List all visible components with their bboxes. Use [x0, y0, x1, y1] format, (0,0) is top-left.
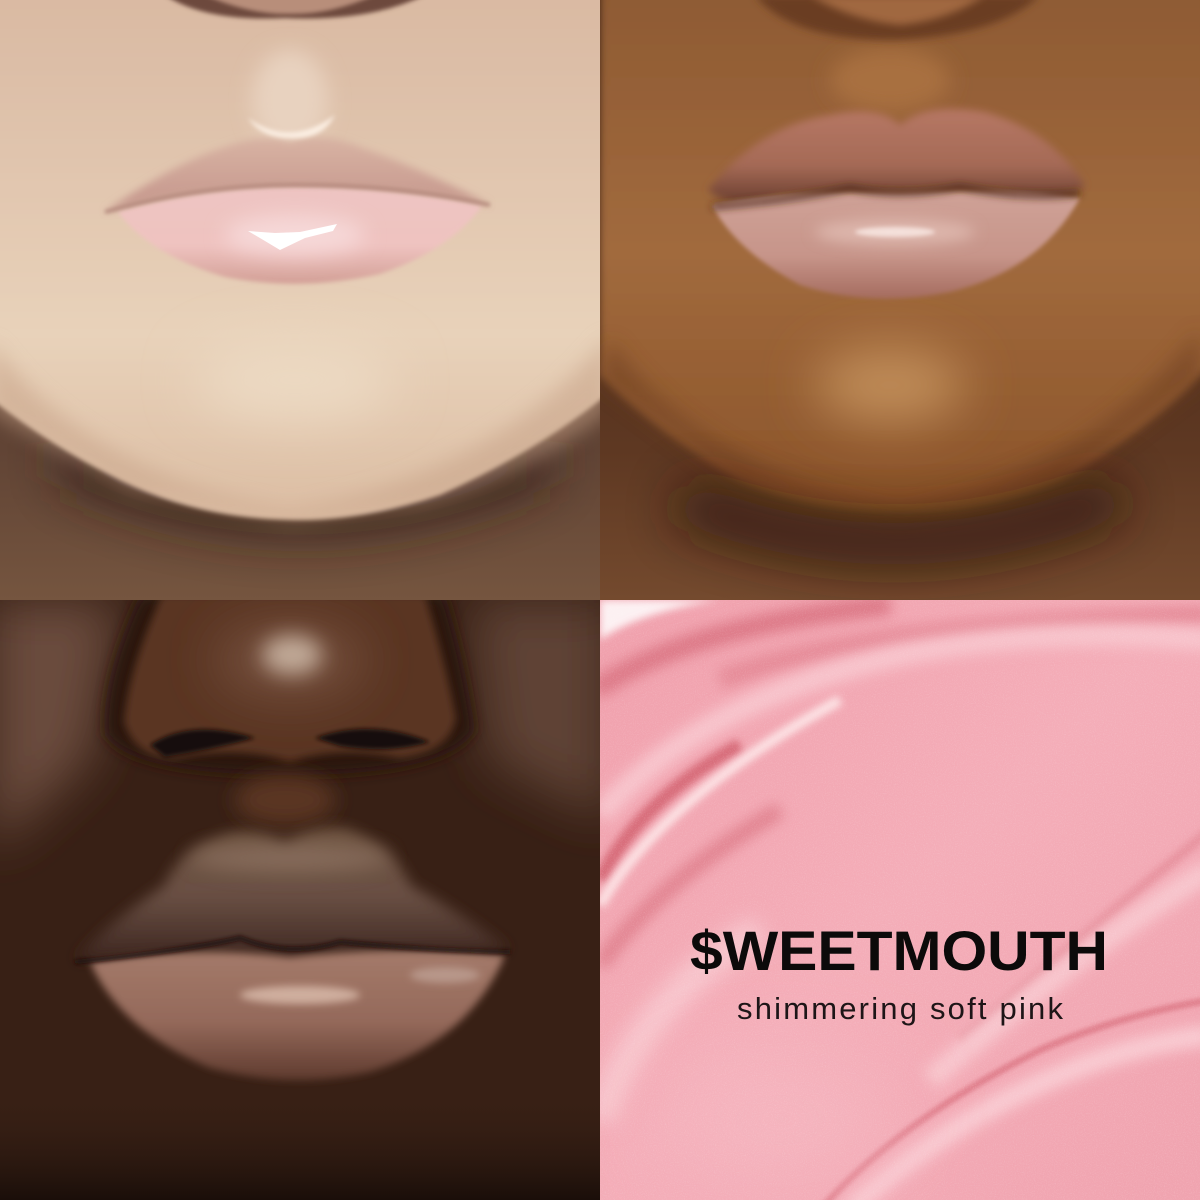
gloss streaks	[600, 600, 720, 640]
lower lip	[118, 187, 482, 284]
gloss highlight	[248, 224, 337, 250]
shade name: $WEETMOUTH	[690, 919, 1108, 982]
cheeks	[0, 600, 120, 850]
nose shadow surround	[104, 595, 475, 775]
upper lip	[75, 828, 510, 960]
shimmer texture	[600, 600, 1200, 1200]
gloss highlight	[240, 986, 360, 1004]
chin and face	[0, 0, 610, 520]
upper lip	[105, 137, 490, 212]
nostrils	[150, 729, 255, 757]
upper lip	[708, 109, 1085, 202]
lower chin shading	[0, 1147, 600, 1200]
panel: light skin lips	[0, 0, 610, 600]
panel: medium skin lips	[600, 0, 1200, 600]
chin and face	[600, 0, 1200, 513]
neck shadow	[60, 440, 550, 535]
lower lip	[712, 191, 1080, 299]
shade description: shimmering soft pink	[737, 991, 1064, 1026]
panel: deep skin lips	[0, 595, 610, 1200]
nose	[124, 595, 456, 762]
panel: pink gloss swatch	[595, 600, 1200, 1200]
gloss highlight	[855, 227, 935, 237]
nose shadow	[165, 0, 425, 19]
nose shadow	[755, 0, 1040, 40]
lower lip	[90, 950, 505, 1080]
